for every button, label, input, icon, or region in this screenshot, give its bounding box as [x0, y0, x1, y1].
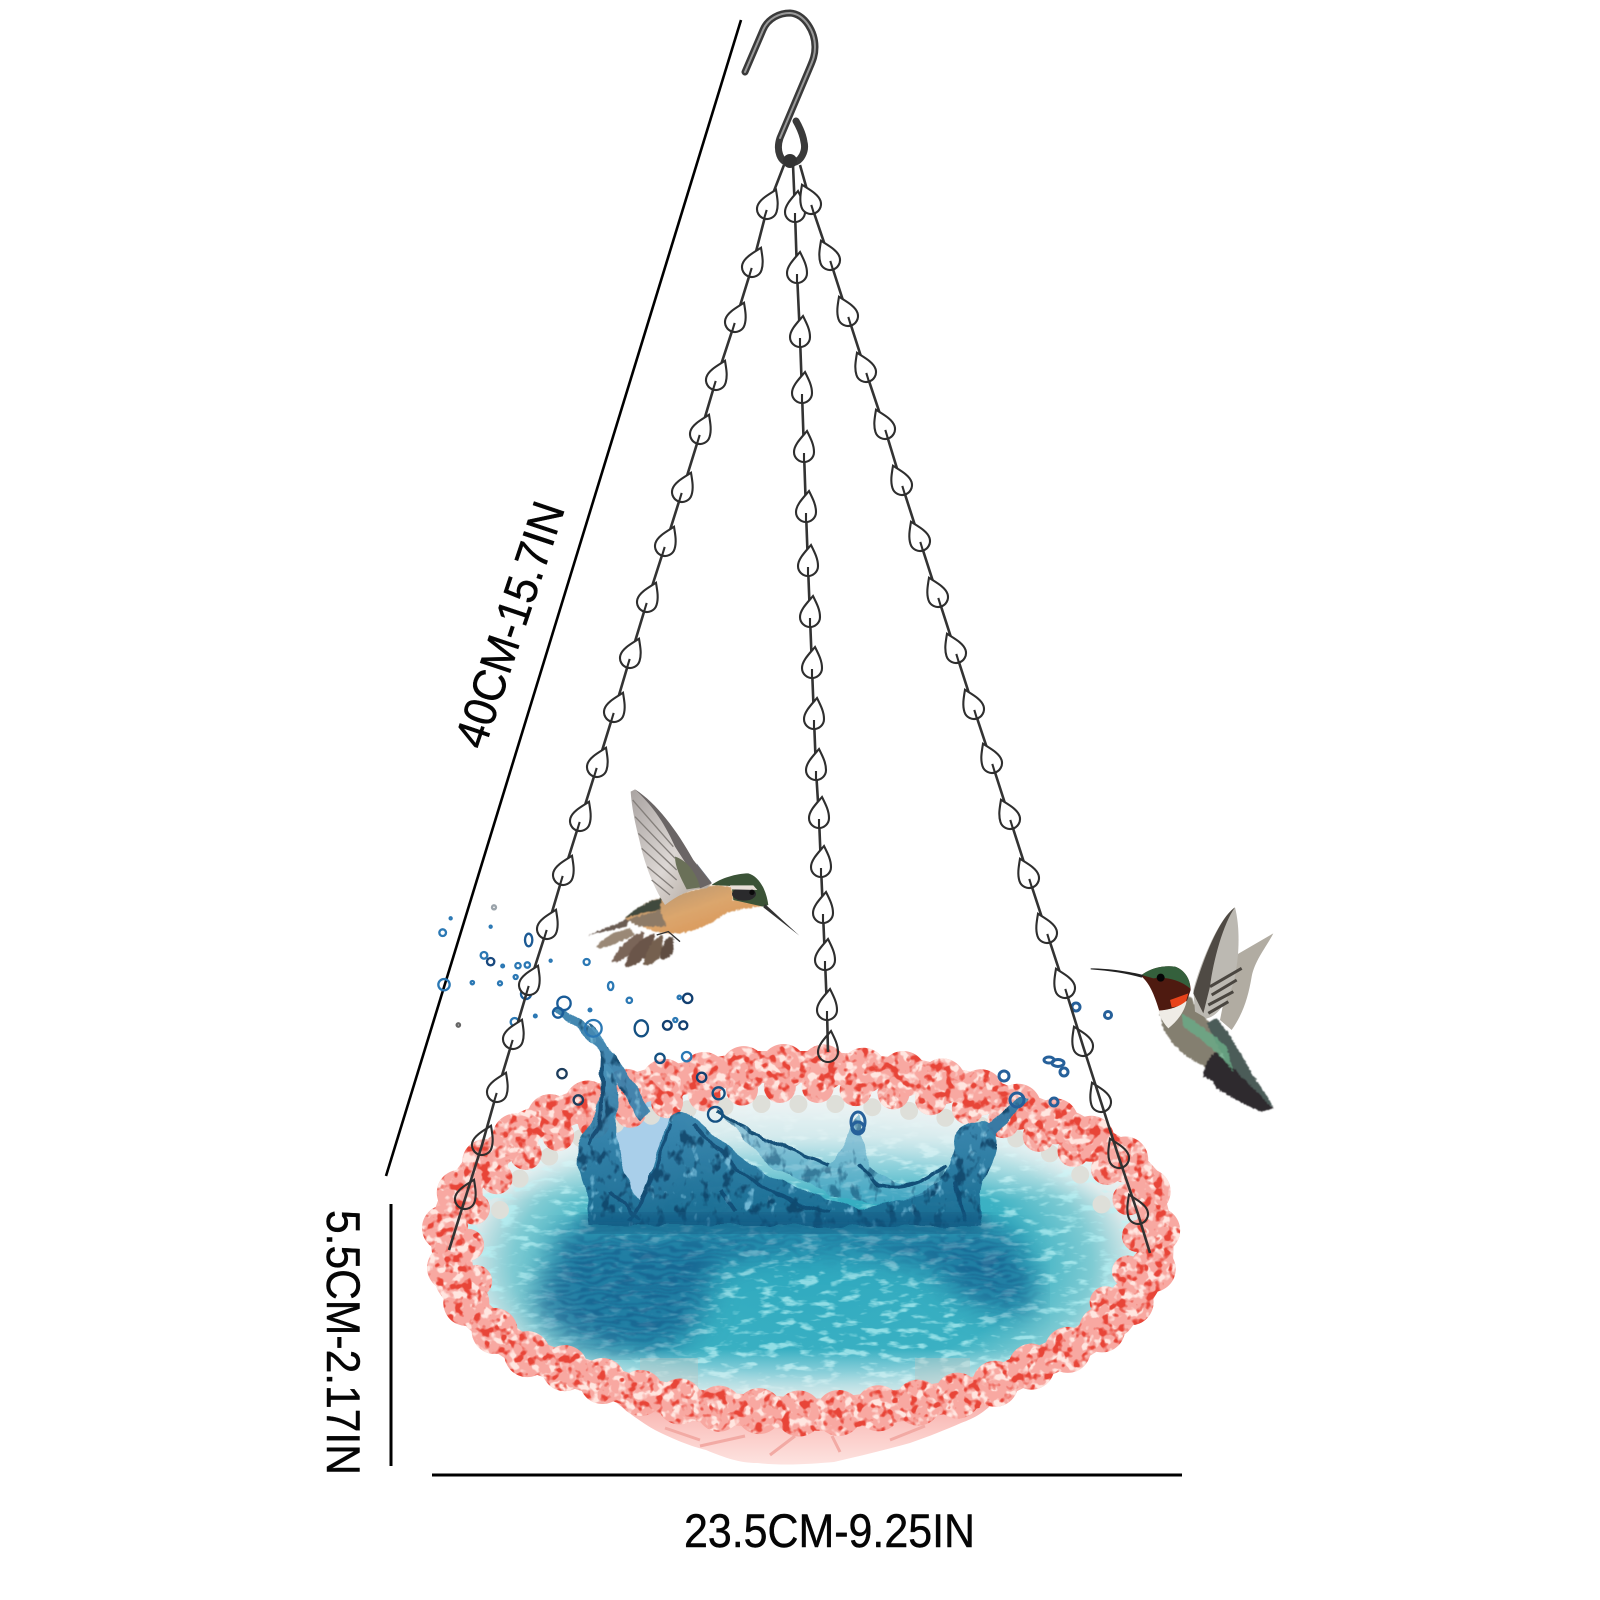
- splash stream: [556, 1007, 650, 1122]
- splash dark lines: [590, 1050, 965, 1222]
- bird bath bowl: [440, 1065, 1165, 1465]
- water droplets right: [851, 1003, 1112, 1134]
- chain right: [795, 165, 1150, 1253]
- S hook: [745, 13, 815, 168]
- right spray: [985, 1095, 1030, 1135]
- scalloped shadow under rim: [500, 1104, 1105, 1210]
- splash main body: [577, 1023, 996, 1226]
- water splash crown: [556, 1007, 1030, 1226]
- width label: 23.5CM-9.25IN: [684, 1504, 975, 1557]
- depth dimension line: [390, 1204, 392, 1466]
- height dimension line: [386, 20, 741, 1176]
- left bird feathers and body: [588, 885, 763, 967]
- beaded pink rim: [445, 1067, 1158, 1415]
- width dimension line: [432, 1474, 1182, 1476]
- water droplets left: [438, 905, 725, 1122]
- right bird body and tail: [1160, 995, 1273, 1112]
- pale blue haze behind splash: [616, 1101, 670, 1200]
- depth label: 5.5CM-2.17IN: [317, 1210, 370, 1475]
- etched glass panels: [640, 1358, 970, 1388]
- splash base shadow: [585, 1214, 985, 1232]
- splash thin sheet: [716, 1110, 945, 1205]
- bowl underside: [604, 1380, 996, 1465]
- chain middle: [785, 165, 838, 1062]
- water reflection: [510, 1215, 1050, 1360]
- icon: hummingbird right: [1091, 907, 1273, 1112]
- water basin: [468, 1083, 1138, 1399]
- icon: hummingbird left: [588, 789, 799, 967]
- height label: 40CM-15.7IN: [444, 495, 575, 754]
- chain left: [449, 165, 784, 1250]
